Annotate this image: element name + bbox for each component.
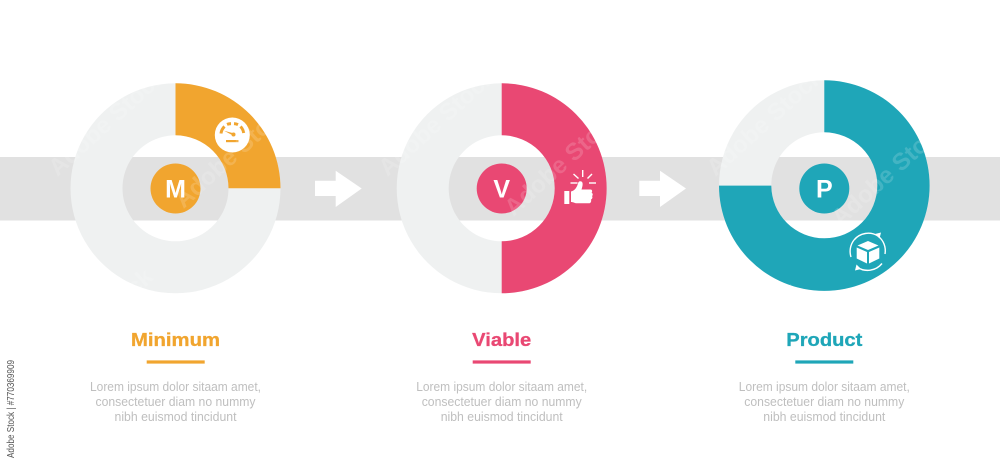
badge: P: P: [816, 176, 833, 204]
watermark pattern: Adobe Stock: [43, 63, 171, 182]
text block: viable: consectetuer diam no nummy: [422, 395, 582, 409]
text block: minimum: Lorem ipsum dolor sitaam amet,: [90, 380, 261, 394]
icon: box with cycle arrows: [850, 232, 885, 270]
chart: three-quarter donut: [719, 80, 930, 291]
underline: viable: [473, 360, 531, 364]
text block: minimum: consectetuer diam no nummy: [96, 395, 256, 409]
heading: Minimum: Minimum: [131, 329, 220, 350]
text block: product: nibh euismod tincidunt: [763, 410, 886, 424]
watermark pattern: Adobe Stock: [31, 263, 159, 382]
text block: product: consectetuer diam no nummy: [744, 395, 905, 409]
watermark pattern: Adobe Stock: [676, 277, 804, 396]
watermark pattern: Adobe Stock: [336, 285, 464, 404]
text block: product: [739, 380, 910, 424]
chart: quarter donut: [71, 83, 281, 293]
stock id caption: Adobe Stock | #770369909: [5, 360, 17, 458]
text block: viable: [416, 380, 587, 424]
underline: minimum: [147, 360, 205, 364]
badge: V: V: [493, 176, 510, 204]
heading: Product: Product: [786, 329, 862, 350]
underline: product: [795, 360, 853, 364]
watermark pattern: Adobe Stock: [373, 63, 501, 182]
panel: viable: [397, 83, 607, 424]
badge: M: [150, 164, 200, 214]
panel: minimum: [71, 83, 281, 424]
watermark pattern: Adobe Stock: [876, 247, 1000, 366]
text block: minimum: [90, 380, 261, 424]
background band: [0, 157, 1000, 220]
icon: thumbs up: [564, 170, 596, 204]
text block: product: Lorem ipsum dolor sitaam amet,: [739, 380, 910, 394]
arrow: viable to product: [639, 171, 686, 207]
text block: minimum: nibh euismod tincidunt: [114, 410, 237, 424]
badge: M: M: [165, 176, 186, 204]
watermark pattern: [31, 63, 1000, 404]
watermark pattern: Adobe Stock: [701, 63, 829, 182]
watermark pattern: Adobe Stock: [499, 103, 627, 222]
arrow: minimum to viable: [315, 171, 362, 207]
badge: V: [477, 164, 527, 214]
icon: speedometer: [215, 118, 250, 152]
text block: viable: nibh euismod tincidunt: [441, 410, 563, 424]
watermark pattern: Adobe Stock: [169, 95, 297, 214]
watermark pattern: Adobe Stock: [211, 233, 339, 352]
panel: product: [719, 80, 930, 424]
badge: P: [799, 164, 849, 214]
watermark pattern: Adobe Stock: [543, 240, 671, 359]
watermark pattern: Adobe Stock: [826, 113, 954, 232]
heading: Viable: Viable: [472, 329, 531, 350]
chart: half donut: [397, 83, 607, 293]
text block: viable: Lorem ipsum dolor sitaam amet,: [416, 380, 587, 394]
